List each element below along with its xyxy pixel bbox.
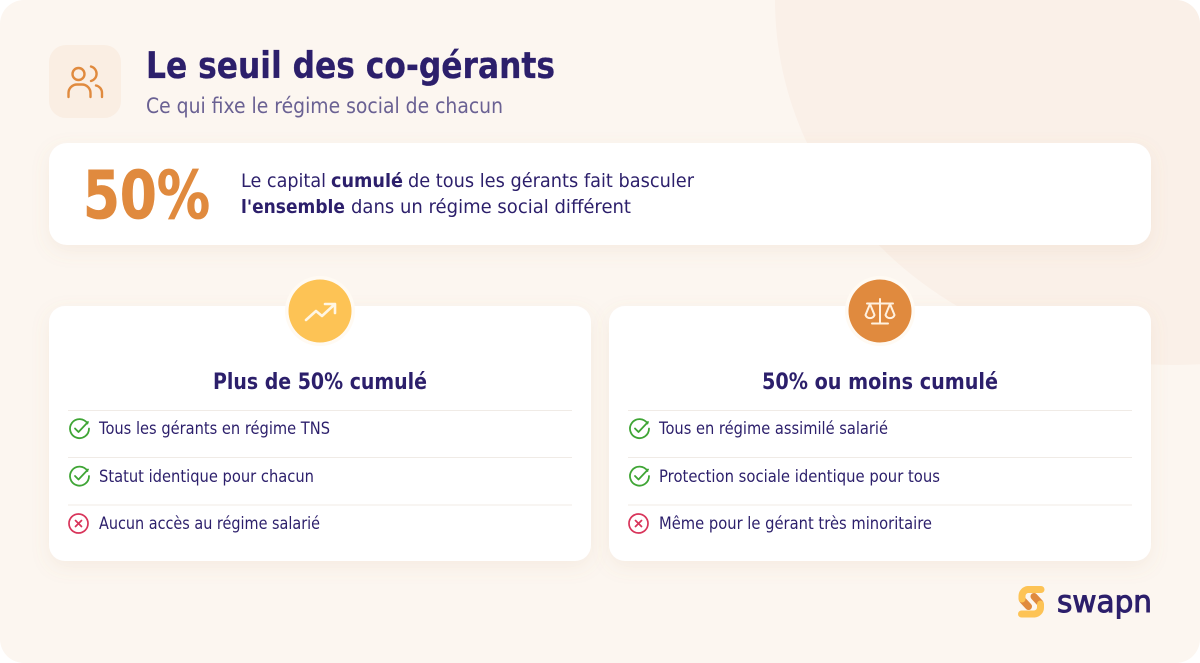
panel: plus de 50% <box>49 276 591 561</box>
banner text: dans un régime social différent <box>351 196 631 218</box>
subtitle: Ce qui fixe le régime social de chacun <box>146 94 503 118</box>
icon: trend up <box>285 276 355 346</box>
item: aucun accès: Aucun accès au régime salarié <box>99 514 320 533</box>
item: minoritaire: Même pour le gérant très minoritaire <box>659 514 932 533</box>
header icon: two people <box>49 45 121 118</box>
logo: swapn: swapn <box>1057 585 1152 620</box>
panel: 50% banner <box>49 143 1151 245</box>
banner text: l'ensemble <box>241 196 345 218</box>
card heading: 50% ou moins cumulé <box>762 370 998 395</box>
panel: 50% ou moins <box>609 276 1151 561</box>
item: protection: Protection sociale identique pour tous <box>659 467 940 486</box>
title: Le seuil des co-gérants <box>146 44 555 87</box>
banner text <box>241 170 694 218</box>
card heading: Plus de 50% cumulé <box>213 370 427 395</box>
item: assimilé: Tous en régime assimilé salarié <box>658 419 888 438</box>
banner text: Le capital <box>241 170 326 192</box>
item: statut: Statut identique pour chacun <box>99 467 314 486</box>
banner text: cumulé <box>331 170 403 192</box>
icon: scales <box>845 276 915 346</box>
big number: 50% <box>83 157 210 234</box>
item: TNS: Tous les gérants en régime TNS <box>98 419 330 438</box>
banner text: de tous les gérants fait basculer <box>408 170 694 192</box>
